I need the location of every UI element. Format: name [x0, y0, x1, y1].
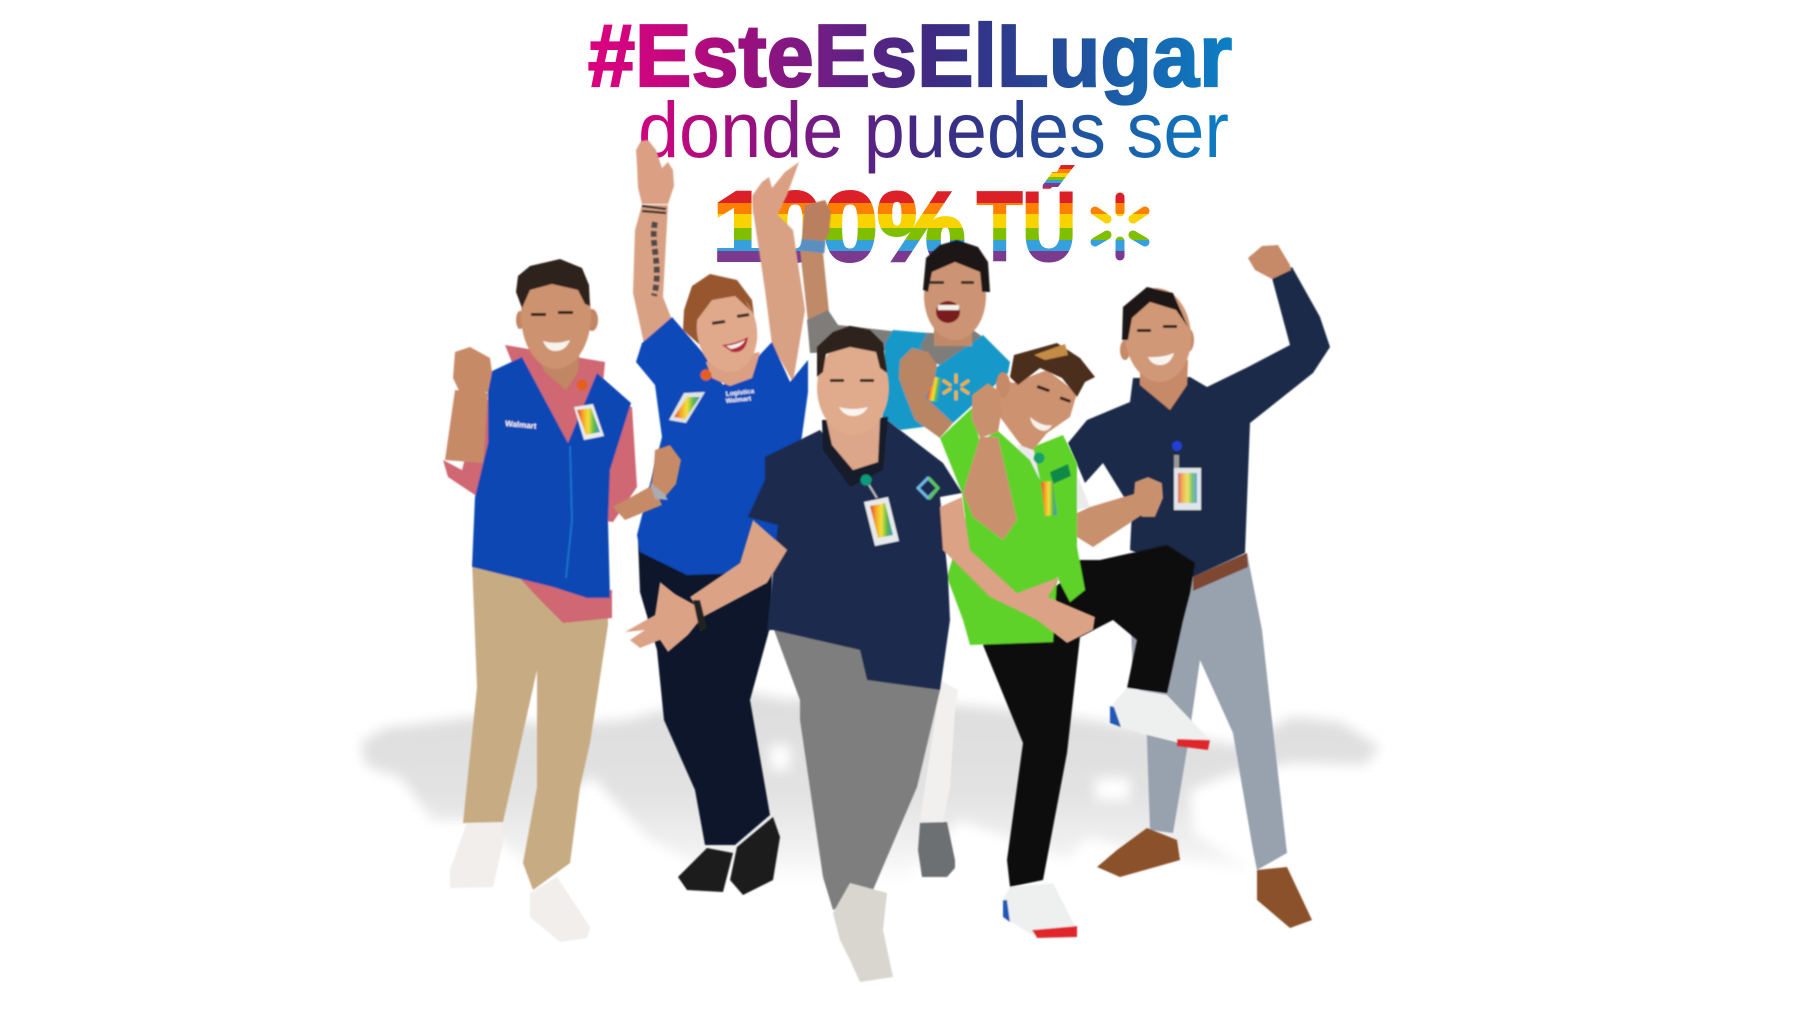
person: navy vest associate, front centre: [625, 326, 1095, 982]
person: blue vest associate, left: [443, 259, 681, 942]
raised arm and fist: [963, 383, 1017, 540]
badge: [1034, 452, 1057, 516]
khaki trousers: [463, 555, 608, 890]
person: green vest associate: [940, 343, 1210, 938]
belt: [1193, 553, 1248, 591]
subtitle: donde puedes ser: donde puedes ser: [638, 85, 1229, 174]
badge: [927, 376, 942, 402]
ID badge: [860, 474, 899, 546]
hair: [683, 274, 757, 345]
dark trousers: [638, 540, 772, 845]
rainbow text: 100% TÚ: [713, 165, 1076, 281]
face: [692, 284, 762, 386]
neck: [826, 418, 880, 470]
ID badge: [1172, 441, 1201, 510]
vest zipper: [566, 446, 572, 578]
worn white sneakers: [833, 883, 893, 982]
icon: rainbow Walmart spark: [1095, 197, 1145, 256]
white sneakers: [450, 823, 590, 942]
ID badge: [574, 380, 604, 440]
grey jeans: [1130, 553, 1287, 870]
floor shadow: [360, 690, 1380, 887]
grey sneaker: [918, 822, 955, 877]
teal shirt: [882, 330, 1010, 430]
ID badge with lanyard: [669, 370, 712, 423]
vest logo: teal diamond: [918, 478, 938, 499]
navy shirt: [1068, 267, 1330, 577]
white t-shirt: [952, 445, 1090, 510]
left arm and open hand: [625, 520, 787, 652]
black trousers: [983, 545, 1195, 887]
polo shirt: [636, 317, 808, 575]
raised sneaker: [1110, 688, 1210, 750]
green vest: [940, 408, 1085, 645]
raised fist: [1248, 245, 1291, 279]
grey trousers: [773, 627, 940, 910]
rainbow text: 100% TÚ: TÚ: [977, 172, 1076, 281]
title: hashtag line: #EsteEsElLugar: [588, 6, 1232, 105]
rainbow text: 100% TÚ: 100%: [713, 172, 965, 281]
yellow spark logo: [944, 375, 968, 399]
brown shoes: [1097, 828, 1312, 928]
dark collar: [822, 417, 888, 487]
bracelets: [642, 206, 666, 213]
lower sneaker: [1003, 883, 1077, 938]
vest logo text: Walmart: [505, 419, 537, 431]
neck and head: [516, 259, 598, 390]
grey undershirt: [807, 310, 987, 365]
shirt logo text second line: Walmart: [725, 395, 752, 405]
head: [923, 240, 990, 346]
person: logistics associate in blue polo: [633, 140, 808, 895]
blue vest: [472, 357, 631, 598]
lower arm and fist: [613, 445, 681, 520]
person: teal shirt associate, back centre: [800, 200, 1010, 877]
pink sleeves and placket: [443, 345, 637, 522]
lower pink shirt: [503, 560, 612, 623]
person: navy shirt associate, right: [1068, 245, 1330, 928]
head: [817, 326, 889, 435]
raised arm: [800, 200, 831, 322]
head: [996, 343, 1095, 450]
right raised hand: [752, 162, 799, 214]
name tag: [1050, 464, 1071, 484]
left raised hand: [636, 140, 674, 204]
shirt logo text: Logística: [725, 388, 755, 398]
raised arm and fist: [445, 347, 492, 463]
arm tattoo: [654, 222, 657, 296]
black shoes: [678, 817, 780, 895]
head: [1120, 286, 1194, 410]
right raised arm: [753, 210, 805, 382]
navy vest: [748, 420, 962, 690]
right arm and open hand: [940, 497, 1095, 643]
left raised arm: [633, 205, 672, 362]
pointing arm and fist: [1077, 477, 1163, 547]
white trousers: [920, 680, 958, 822]
forearm and fist: [899, 348, 953, 438]
